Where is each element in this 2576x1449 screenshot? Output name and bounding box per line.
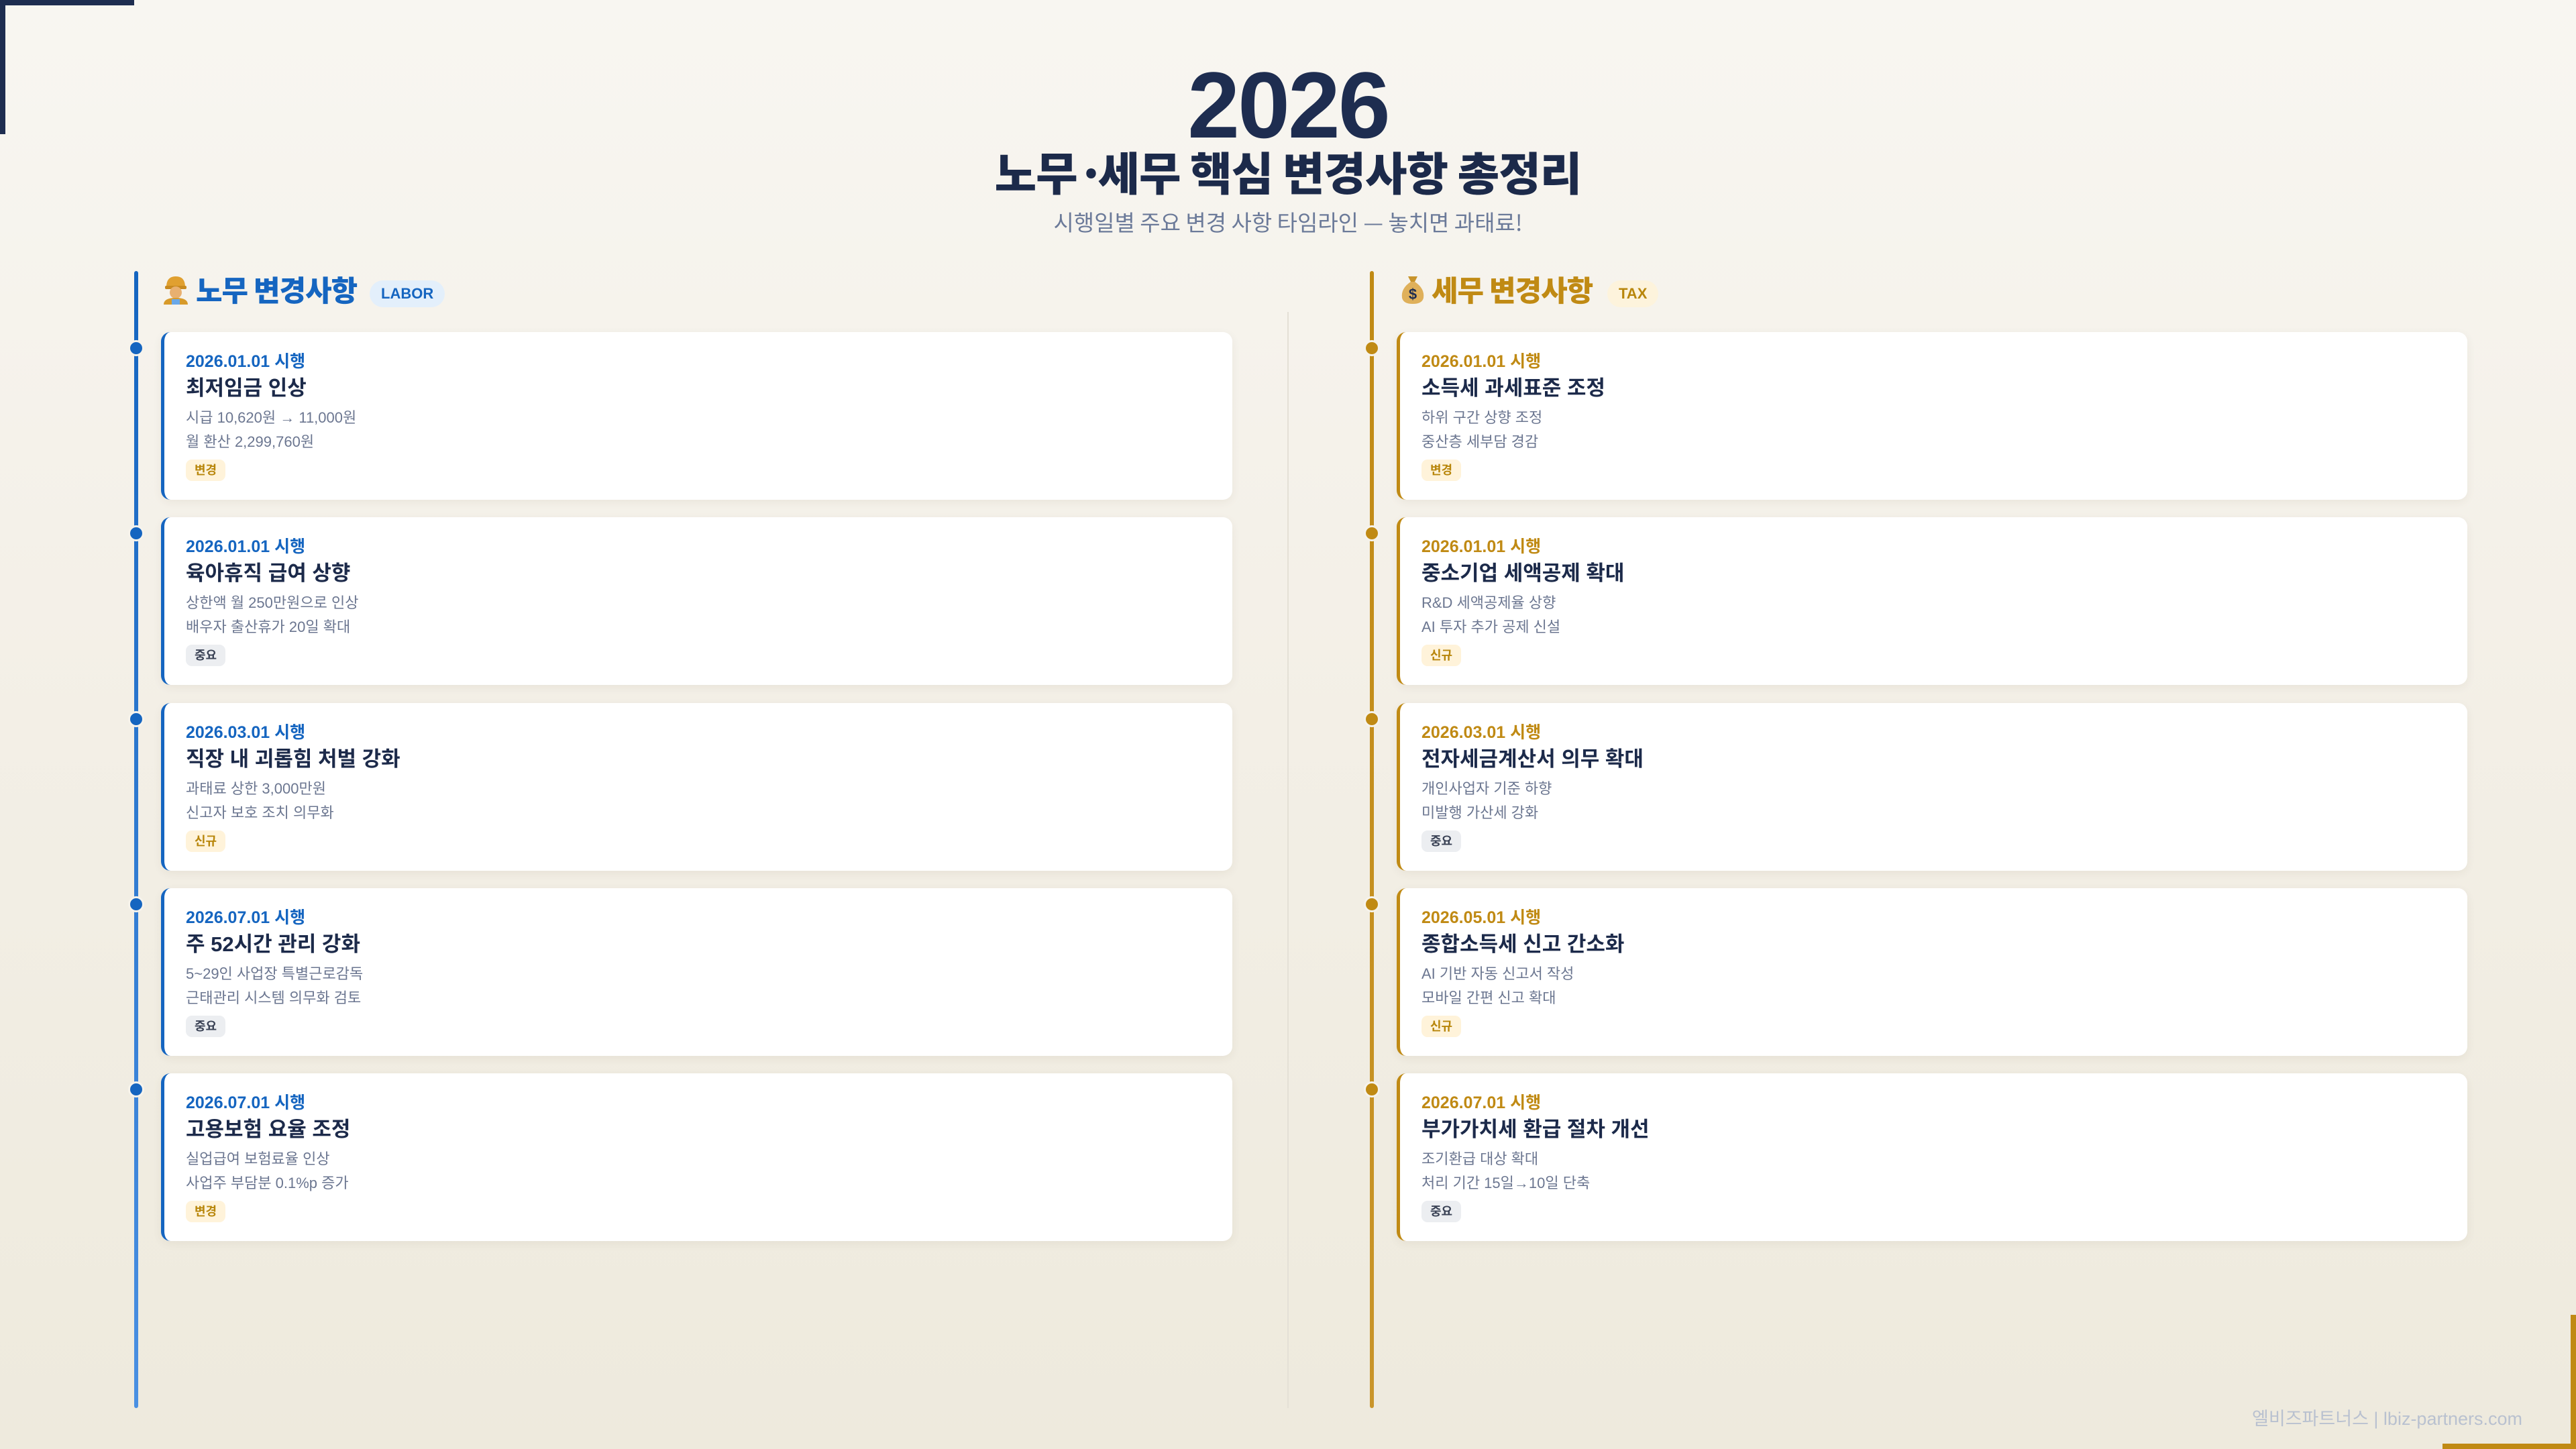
title: main: 노무· 세무 핵심 변경사항 총정리 [995,138,1581,204]
icon: money bag [1402,276,1424,304]
card: 부가가치세 환급 절차 개선: 부가가치세 환급 절차 개선 [1421,1118,1650,1141]
card: 부가가치세 환급 절차 개선: 2026.07.01 시행 [1421,1093,1541,1112]
card: 중소기업 세액공제 확대: 중소기업 세액공제 확대 [1421,561,1624,585]
heading: tax [1402,268,1658,310]
tag: TAX: TAX [1619,285,1647,302]
card: 전자세금계산서 의무 확대: 2026.03.01 시행 [1421,723,1541,742]
card: 직장 내 괴롭힘 처벌 강화: 과태료 상한 3,000만원 [186,780,326,797]
card: 육아휴직 급여 상향: 2026.01.01 시행 [186,537,305,556]
panel: tax [1370,268,1658,1408]
card: 직장 내 괴롭힘 처벌 강화: 2026.03.01 시행 [186,723,305,742]
card: 고용보험 요율 조정: 고용보험 요율 조정 [186,1118,350,1141]
card: 직장 내 괴롭힘 처벌 강화: 신규 [195,835,217,848]
corner accent top-left [0,0,134,134]
card: 종합소득세 신고 간소화: 2026.05.01 시행 [1421,908,1541,927]
card: 종합소득세 신고 간소화: AI 기반 자동 신고서 작성 [1421,965,1574,982]
title: year: 2026 [1187,52,1389,158]
card: 주 52시간 관리 강화 [161,888,1232,1056]
card: 부가가치세 환급 절차 개선 [1397,1073,2467,1241]
card: 부가가치세 환급 절차 개선: 중요 [1430,1205,1452,1218]
icon: money bag: $ [1409,286,1417,303]
subtitle: 시행일별 주요 변경 사항 타임라인 — 놓치면 과태료! [1053,205,1523,237]
card: 종합소득세 신고 간소화: 종합소득세 신고 간소화 [1421,932,1624,956]
card: 직장 내 괴롭힘 처벌 강화: 직장 내 괴롭힘 처벌 강화 [186,747,400,771]
card: 고용보험 요율 조정: 사업주 부담분 0.1%p 증가 [186,1175,349,1191]
card: 육아휴직 급여 상향: 중요 [195,649,217,662]
card: 중소기업 세액공제 확대: 2026.01.01 시행 [1421,537,1541,556]
card: 직장 내 괴롭힘 처벌 강화 [161,703,1232,871]
heading: labor [164,268,445,310]
timeline line: labor [134,271,138,1408]
card: 최저임금 인상: 최저임금 인상 [186,376,307,400]
card: 중소기업 세액공제 확대: AI 투자 추가 공제 신설 [1421,619,1560,635]
card: 육아휴직 급여 상향: 배우자 출산휴가 20일 확대 [186,619,350,635]
card: 주 52시간 관리 강화: 5~29인 사업장 특별근로감독 [186,965,363,982]
card: 최저임금 인상: 월 환산 2,299,760원 [186,433,314,450]
tag: TAX [1607,280,1658,307]
card: 소득세 과세표준 조정: 중산층 세부담 경감 [1421,433,1538,450]
card: 중소기업 세액공제 확대: R&D 세액공제율 상향 [1421,594,1556,611]
card: 고용보험 요율 조정 [161,1073,1232,1241]
card: 소득세 과세표준 조정: 하위 구간 상향 조정 [1421,409,1542,426]
card: 고용보험 요율 조정: 실업급여 보험료율 인상 [186,1150,330,1167]
tag: LABOR: LABOR [381,285,433,302]
heading: labor: 노무 변경사항 [196,268,357,310]
tag: LABOR [370,280,445,307]
card: 전자세금계산서 의무 확대: 미발행 가산세 강화 [1421,804,1538,821]
card: 주 52시간 관리 강화: 2026.07.01 시행 [186,908,305,927]
card: 종합소득세 신고 간소화 [1397,888,2467,1056]
card: 소득세 과세표준 조정: 2026.01.01 시행 [1421,352,1541,371]
card: 고용보험 요율 조정: 2026.07.01 시행 [186,1093,305,1112]
card: 중소기업 세액공제 확대: 신규 [1430,649,1452,662]
card: 직장 내 괴롭힘 처벌 강화: 신고자 보호 조치 의무화 [186,804,334,821]
card: 주 52시간 관리 강화: 근태관리 시스템 의무화 검토 [186,989,361,1006]
timeline line: tax [1370,271,1374,1408]
card: 육아휴직 급여 상향 [161,517,1232,685]
card: 부가가치세 환급 절차 개선: 조기환급 대상 확대 [1421,1150,1538,1167]
card: 주 52시간 관리 강화: 중요 [195,1020,217,1033]
card: 고용보험 요율 조정: 변경 [195,1205,217,1218]
card: 주 52시간 관리 강화: 주 52시간 관리 강화 [186,932,360,956]
corner accent bottom-right [2443,1315,2576,1449]
footer: 엘비즈파트너스 | lbiz-partners.com [2252,1409,2522,1429]
card: 전자세금계산서 의무 확대: 중요 [1430,835,1452,848]
card: 종합소득세 신고 간소화: 신규 [1430,1020,1452,1033]
center divider [1287,312,1289,1408]
card: 전자세금계산서 의무 확대: 개인사업자 기준 하향 [1421,780,1552,797]
panel: labor [134,268,445,1408]
icon: worker [164,276,188,305]
card: 최저임금 인상 [161,332,1232,500]
card: 소득세 과세표준 조정: 소득세 과세표준 조정 [1421,376,1605,400]
card: 육아휴직 급여 상향: 육아휴직 급여 상향 [186,561,350,585]
card: 최저임금 인상: 2026.01.01 시행 [186,352,305,371]
card: 최저임금 인상: 변경 [195,464,217,477]
card: 최저임금 인상: 시급 10,620원 → 11,000원 [186,409,356,426]
card: 소득세 과세표준 조정 [1397,332,2467,500]
card: 육아휴직 급여 상향: 상한액 월 250만원으로 인상 [186,594,358,611]
heading: tax: 세무 변경사항 [1432,268,1593,310]
card: 종합소득세 신고 간소화: 모바일 간편 신고 확대 [1421,989,1556,1006]
card: 소득세 과세표준 조정: 변경 [1430,464,1452,477]
card: 전자세금계산서 의무 확대: 전자세금계산서 의무 확대 [1421,747,1644,771]
card: 중소기업 세액공제 확대 [1397,517,2467,685]
card: 부가가치세 환급 절차 개선: 처리 기간 15일→10일 단축 [1421,1175,1590,1191]
card: 전자세금계산서 의무 확대 [1397,703,2467,871]
